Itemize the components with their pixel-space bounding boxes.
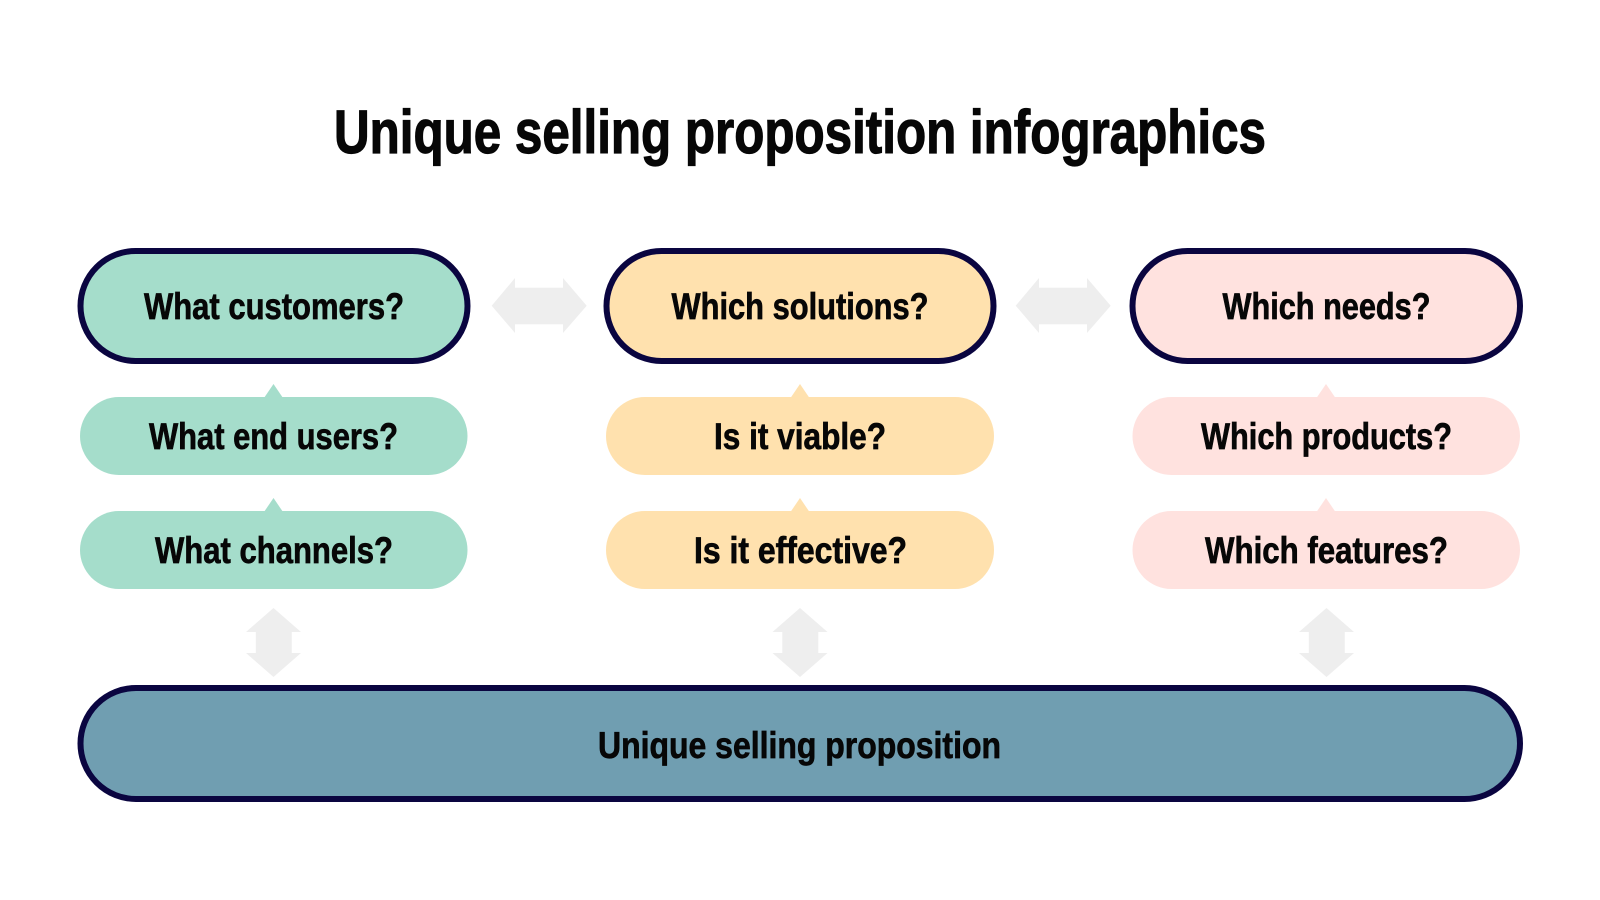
- heading pill: Which solutions?: [606, 251, 994, 361]
- panel: solutions column: [606, 251, 994, 589]
- arrow: customers to solutions: [492, 278, 587, 333]
- heading pill: Which solutions?: Which solutions?: [672, 286, 928, 327]
- pill: Which features?: Which features?: [1205, 530, 1448, 571]
- pill: What channels?: What channels?: [155, 530, 393, 571]
- arrow: solutions to needs: [1016, 278, 1111, 333]
- panel: unique selling proposition bar: [80, 688, 1520, 799]
- heading pill: What customers?: [80, 251, 468, 361]
- heading pill: Which needs?: Which needs?: [1222, 286, 1430, 327]
- pill: Is it viable?: [606, 384, 994, 475]
- arrow: needs to proposition: [1299, 608, 1354, 677]
- arrow: solutions to proposition: [772, 608, 828, 677]
- pill: Is it effective?: Is it effective?: [694, 530, 907, 571]
- pill: What end users?: What end users?: [149, 416, 398, 457]
- panel: customers column: [80, 251, 468, 589]
- heading pill: What customers?: What customers?: [144, 286, 404, 327]
- pill: What end users?: [80, 384, 468, 475]
- pill: Which products?: [1132, 384, 1520, 475]
- panel: unique selling proposition bar: Unique selling proposition: [598, 725, 1001, 766]
- pill: Is it effective?: [606, 498, 994, 589]
- pill: Is it viable?: Is it viable?: [714, 416, 886, 457]
- pill: Which products?: Which products?: [1201, 416, 1452, 457]
- panel: needs column: [1132, 251, 1520, 589]
- pill: What channels?: [80, 498, 468, 589]
- arrow: customers to proposition: [246, 608, 301, 677]
- heading pill: Which needs?: [1132, 251, 1520, 361]
- pill: Which features?: [1132, 498, 1520, 589]
- title: Unique selling proposition infographics: [334, 98, 1266, 166]
